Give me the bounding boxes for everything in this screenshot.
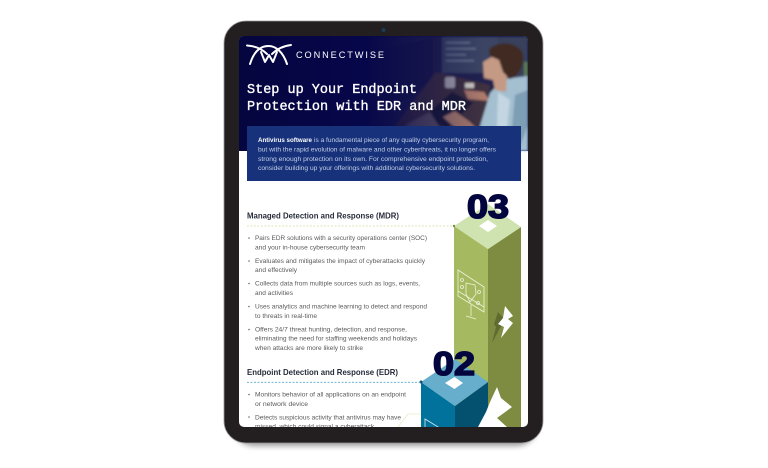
MDR bullet list: to threats in real-time [255,313,317,320]
title: Step up Your Endpoint [247,83,417,98]
tablet device [224,21,543,446]
number 03: 03 [467,188,509,225]
screen [239,36,528,440]
EDR bullet list [248,392,406,427]
intro text box: is a fundamental piece of any quality cybersecurity program, [314,137,489,144]
section: Endpoint Detection and Response [247,367,421,430]
MDR bullet list: Pairs EDR solutions with a security operations center (SOC) [255,235,427,242]
EDR bullet list: Detects suspicious activity that antivirus may have [255,414,401,422]
intro text box [247,126,521,181]
column 02 [420,351,512,427]
MDR bullet list: and effectively [255,267,298,274]
title [247,82,466,110]
logo: ConnectWise [247,45,384,64]
MDR bullet list: eliminating the need for staffing weekends and holidays [255,336,418,342]
header photo banner [239,36,528,151]
number 02: 02 [433,345,475,382]
column 03 [454,188,521,427]
logo mark [247,45,291,64]
section: Managed Detection and Response [247,210,455,352]
icon: lightning [492,306,513,343]
EDR bullet list: Monitors behavior of all applications on an endpoint [255,392,406,398]
EDR bullet list: missed, which could signal a cyberattack [255,424,375,430]
title: Protection with EDR and MDR [247,100,466,115]
icon: large lightning [478,387,512,427]
icon: monitor outline [424,418,439,427]
MDR bullet list: Offers 24/7 threat hunting, detection, and response, [255,326,407,334]
logo wordmark: CONNECTWISE [296,50,384,60]
intro text box: strong enough protection on its own. For comprehensive endpoint protection, [258,156,488,163]
icon: monitor shield [458,270,484,319]
intro text box: but with the rapid evolution of malware and other cyberthreats, it no longer offers [258,146,497,154]
heading EDR: Endpoint Detection and Response (EDR) [247,367,398,377]
MDR bullet list: Collects data from multiple sources such as logs, events, [255,280,420,288]
MDR bullet list: when attacks are more likely to strike [254,345,363,352]
MDR bullet list: Evaluates and mitigates the impact of cyberattacks quickly [255,258,426,265]
heading MDR: Managed Detection and Response (MDR) [247,210,399,220]
intro text box: consider building up your offerings with additional cybersecurity solutions. [258,165,475,172]
MDR bullet list: and your in-house cybersecurity team [255,244,366,252]
EDR bullet list: or network device [255,401,308,408]
MDR bullet list [248,235,427,352]
MDR bullet list: Uses analytics and machine learning to detect and respond [255,304,427,310]
intro text box: Antivirus software [258,137,312,144]
MDR bullet list: and activities [255,290,294,297]
